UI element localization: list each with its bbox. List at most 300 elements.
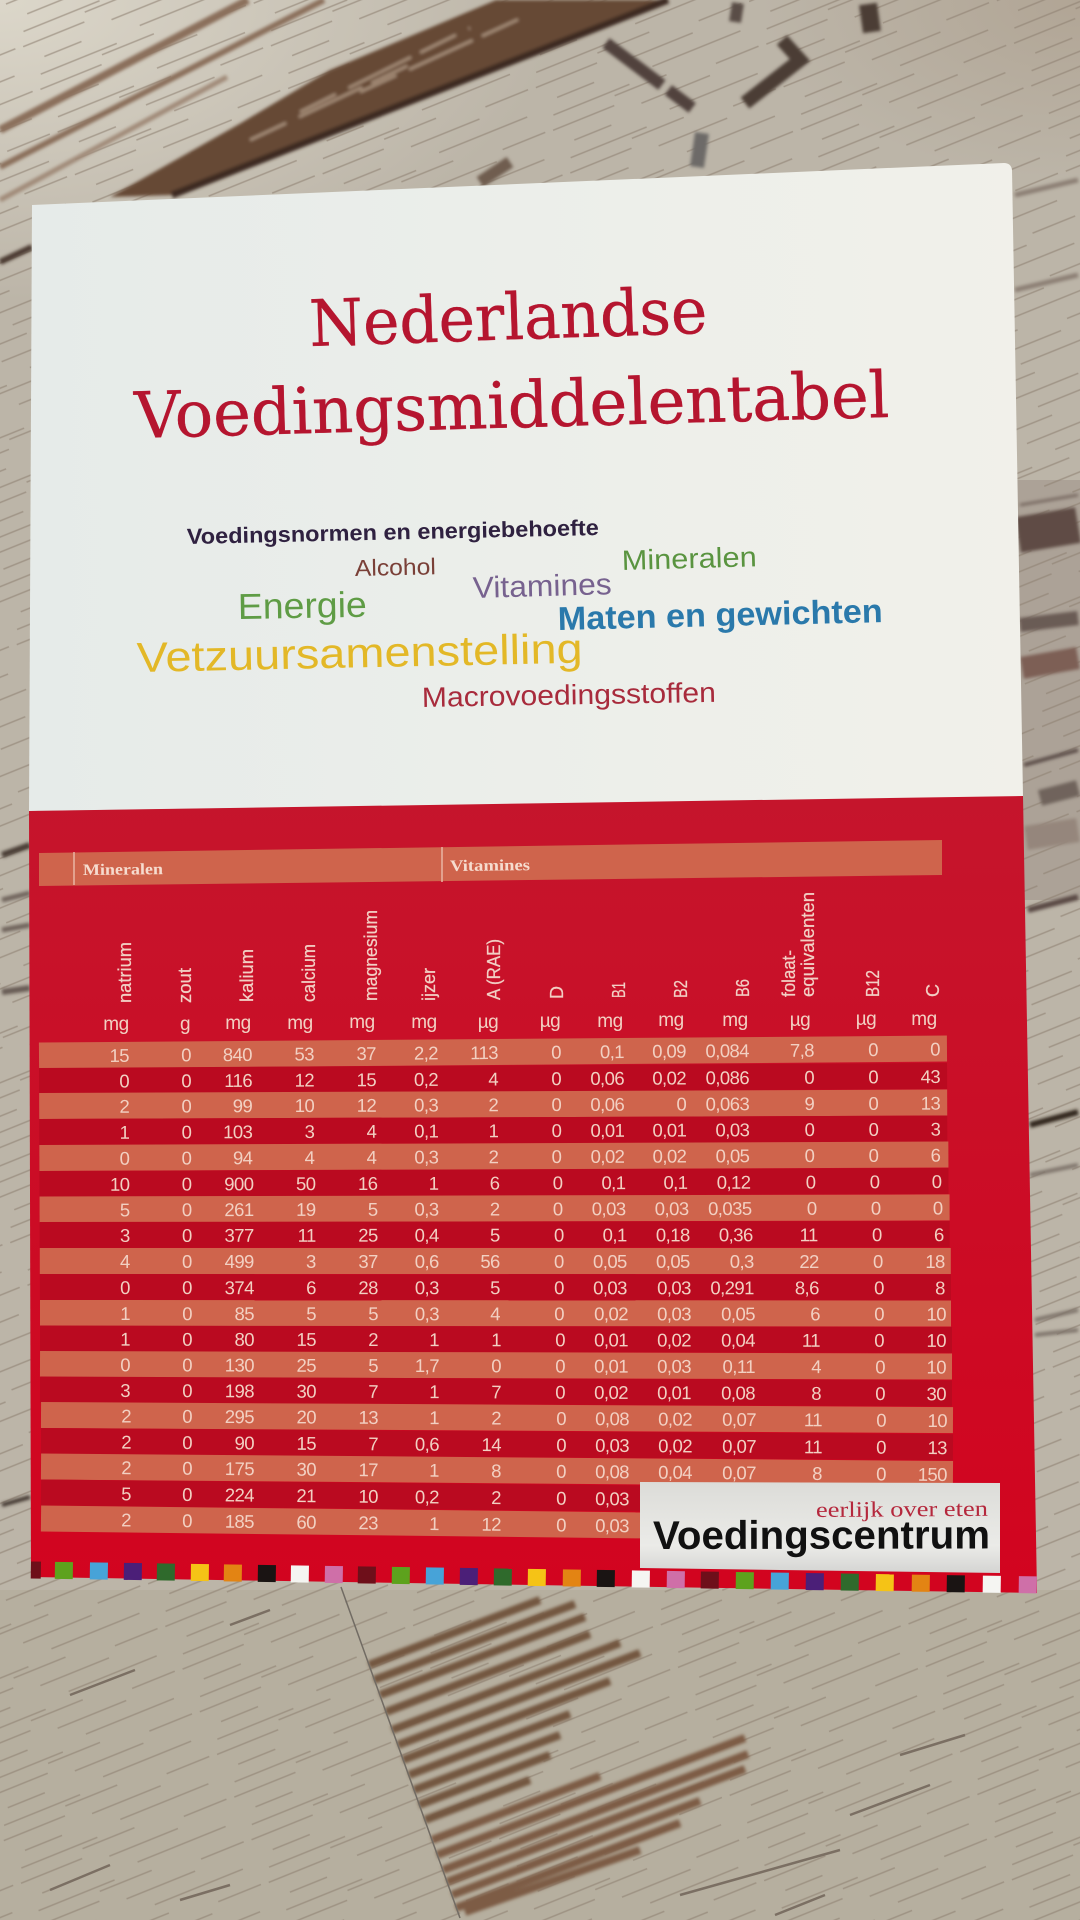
table row 4: 4 bbox=[367, 1121, 377, 1142]
word cloud of topics bbox=[136, 515, 883, 713]
table row 17: 17 bbox=[358, 1459, 378, 1480]
table row 16: 13 bbox=[927, 1437, 947, 1458]
table row 3: 0,063 bbox=[706, 1093, 749, 1114]
table row 15: 0,08 bbox=[595, 1408, 629, 1429]
table row 16: 0 bbox=[876, 1437, 886, 1458]
table row 4: 0 bbox=[805, 1119, 815, 1140]
unit labels row bbox=[103, 1009, 937, 1035]
rotated column headers: ijzer bbox=[419, 968, 439, 1001]
unit labels row: µg bbox=[478, 1012, 498, 1033]
table row 1: 15 bbox=[109, 1045, 129, 1066]
rotated column headers: equivalenten bbox=[798, 892, 818, 997]
table row 11 bbox=[40, 1300, 951, 1326]
table row 7: 5 bbox=[368, 1199, 378, 1220]
table row 1: 0,09 bbox=[652, 1041, 686, 1062]
table row 17: 0 bbox=[876, 1463, 886, 1484]
table row 9: 0,05 bbox=[593, 1251, 627, 1272]
table row 8: 5 bbox=[490, 1225, 500, 1246]
table row 19: 0 bbox=[556, 1514, 566, 1536]
table row 17: 150 bbox=[918, 1464, 947, 1485]
table row 8: 0,4 bbox=[415, 1225, 439, 1246]
table row 3: 0 bbox=[181, 1095, 191, 1116]
table row 9: 0 bbox=[554, 1251, 564, 1272]
table row 15: 0,07 bbox=[722, 1409, 756, 1430]
table row 17: 0,08 bbox=[595, 1461, 629, 1482]
table row 17: 2 bbox=[121, 1457, 131, 1478]
table row 12: 0,04 bbox=[721, 1330, 755, 1351]
table row 19: 2 bbox=[121, 1509, 131, 1531]
table row 12: 2 bbox=[368, 1329, 378, 1350]
table row 10: 0 bbox=[120, 1277, 130, 1298]
table row 15: 20 bbox=[296, 1406, 316, 1428]
table row 11: 6 bbox=[810, 1303, 820, 1324]
table row 17: 8 bbox=[491, 1460, 501, 1481]
table row 9: 4 bbox=[120, 1251, 130, 1272]
table row 5: 0,3 bbox=[414, 1146, 439, 1168]
table row 16: 15 bbox=[296, 1433, 316, 1454]
table row 1: 0 bbox=[868, 1039, 878, 1060]
title: Nederlandse bbox=[308, 275, 708, 362]
table row 8: 377 bbox=[224, 1225, 254, 1246]
table row 8: 0 bbox=[182, 1225, 192, 1246]
table row 2: 43 bbox=[921, 1066, 940, 1087]
table row 6: 0 bbox=[182, 1173, 192, 1195]
table row 18: 0 bbox=[556, 1488, 566, 1509]
table row 13 bbox=[40, 1351, 952, 1380]
word cloud of topics: Mineralen bbox=[621, 541, 757, 576]
table row 8: 25 bbox=[358, 1225, 378, 1246]
table row 19: 1 bbox=[429, 1513, 439, 1534]
table row 7: 0,03 bbox=[592, 1198, 626, 1219]
table row 14 bbox=[40, 1377, 952, 1406]
table row 18: 224 bbox=[225, 1484, 254, 1506]
table row 5: 4 bbox=[367, 1147, 377, 1168]
table row 13: 0 bbox=[182, 1354, 192, 1375]
table row 1: 53 bbox=[294, 1043, 314, 1065]
table row 10: 0 bbox=[874, 1277, 884, 1298]
table row 9: 0,6 bbox=[415, 1251, 439, 1272]
rotated column headers: folaat- bbox=[779, 950, 799, 997]
table row 10: 6 bbox=[306, 1277, 316, 1298]
rotated column headers: B2 bbox=[671, 980, 691, 998]
table row 7: 0 bbox=[871, 1198, 881, 1219]
table row 19: 0 bbox=[182, 1510, 192, 1531]
table row 6: 0 bbox=[806, 1171, 816, 1192]
table row 10: 0,3 bbox=[415, 1277, 439, 1298]
table row 5: 2 bbox=[489, 1146, 499, 1167]
table row 10: 28 bbox=[358, 1277, 378, 1298]
table row 5: 6 bbox=[931, 1145, 941, 1166]
table row 14: 1 bbox=[429, 1381, 439, 1402]
table row 7: 5 bbox=[120, 1199, 130, 1220]
unit labels row: µg bbox=[790, 1010, 810, 1031]
table row 8: 3 bbox=[120, 1225, 130, 1246]
table row 4: 1 bbox=[489, 1120, 499, 1141]
table row 12: 11 bbox=[802, 1330, 820, 1351]
table header strip bbox=[39, 840, 942, 886]
table row 6: 1 bbox=[429, 1173, 439, 1194]
table row 14: 8 bbox=[811, 1383, 821, 1404]
table row 13: 10 bbox=[926, 1356, 946, 1378]
table row 3: 0,3 bbox=[414, 1094, 438, 1116]
table row 13: 4 bbox=[811, 1356, 821, 1377]
table row 16: 0,02 bbox=[658, 1435, 692, 1456]
table row 19: 185 bbox=[225, 1511, 254, 1532]
table row 2: 0 bbox=[804, 1067, 814, 1088]
nutrient data table bbox=[39, 1036, 953, 1538]
table row 2: 0 bbox=[551, 1068, 561, 1089]
table row 11: 0,03 bbox=[657, 1303, 691, 1324]
table row 7: 0,035 bbox=[708, 1198, 752, 1219]
table row 3: 0 bbox=[676, 1094, 686, 1115]
table row 5: 0 bbox=[805, 1145, 815, 1166]
table row 3: 0 bbox=[551, 1094, 561, 1115]
table row 5: 0,02 bbox=[653, 1146, 687, 1167]
table row 14: 198 bbox=[225, 1380, 254, 1401]
table row 2: 116 bbox=[224, 1070, 252, 1091]
table row 14: 30 bbox=[296, 1381, 316, 1402]
table row 13: 0 bbox=[555, 1355, 565, 1376]
table row 12: 1 bbox=[120, 1329, 130, 1350]
table row 4: 1 bbox=[120, 1122, 130, 1143]
table row 18: 21 bbox=[296, 1485, 316, 1506]
word cloud of topics: Voedingsnormen en energiebehoefte bbox=[187, 515, 599, 549]
table row 19: 23 bbox=[358, 1512, 378, 1533]
table row 6 bbox=[39, 1168, 949, 1197]
table row 15: 11 bbox=[804, 1409, 822, 1430]
table row 2: 0 bbox=[868, 1066, 878, 1087]
unit labels row: mg bbox=[911, 1009, 937, 1030]
table row 17: 30 bbox=[296, 1459, 316, 1480]
table row 4: 0,01 bbox=[652, 1120, 687, 1141]
table row 13: 1,7 bbox=[415, 1355, 439, 1376]
table header strip: Vitamines bbox=[450, 857, 530, 875]
table row 14: 0,08 bbox=[721, 1382, 755, 1403]
table row 1: 0,1 bbox=[600, 1041, 624, 1062]
table row 12: 0,02 bbox=[657, 1329, 691, 1351]
table row 17: 1 bbox=[429, 1460, 439, 1481]
table row 11: 0 bbox=[554, 1303, 564, 1324]
table row 9: 0,3 bbox=[730, 1251, 754, 1272]
table row 2: 12 bbox=[295, 1069, 314, 1091]
title bbox=[132, 275, 890, 454]
table row 17: 0 bbox=[182, 1458, 192, 1479]
rotated column headers: D bbox=[547, 986, 567, 999]
table row 19: 12 bbox=[481, 1514, 501, 1535]
table row 8 bbox=[40, 1221, 950, 1248]
table row 12 bbox=[40, 1326, 952, 1353]
table row 18: 0,03 bbox=[595, 1488, 629, 1509]
table row 7: 0 bbox=[182, 1199, 192, 1220]
table row 16: 90 bbox=[234, 1432, 254, 1453]
table row 16: 0,03 bbox=[595, 1435, 629, 1456]
table row 14: 0 bbox=[555, 1382, 565, 1403]
table row 7 bbox=[40, 1194, 950, 1222]
table row 13: 0,03 bbox=[657, 1356, 691, 1377]
table row 4: 0,03 bbox=[715, 1119, 750, 1140]
table row 5: 0,05 bbox=[716, 1145, 750, 1166]
table row 3: 10 bbox=[295, 1095, 314, 1116]
table row 10: 0,291 bbox=[710, 1277, 754, 1298]
table row 2: 4 bbox=[488, 1068, 498, 1089]
table row 12: 0 bbox=[555, 1329, 565, 1350]
rotated column headers: zout bbox=[175, 968, 195, 1003]
coloured squares strip bbox=[31, 1562, 1037, 1593]
table row 17: 0,04 bbox=[658, 1462, 692, 1483]
table row 5: 0 bbox=[182, 1147, 192, 1168]
table row 4: 0,01 bbox=[590, 1120, 625, 1141]
table row 6: 0,1 bbox=[601, 1172, 626, 1193]
table row 5: 0 bbox=[552, 1146, 562, 1167]
table row 14: 7 bbox=[491, 1381, 501, 1402]
table row 10: 0 bbox=[182, 1277, 192, 1298]
table row 18: 10 bbox=[358, 1486, 378, 1507]
table row 3: 0,06 bbox=[590, 1094, 624, 1115]
word cloud of topics: Energie bbox=[237, 584, 367, 627]
table row 13: 0 bbox=[875, 1356, 885, 1377]
table row 15: 2 bbox=[491, 1408, 501, 1429]
table row 2: 0,086 bbox=[705, 1067, 749, 1088]
unit labels row: mg bbox=[103, 1014, 129, 1035]
table row 9: 37 bbox=[358, 1251, 378, 1272]
table row 12: 10 bbox=[926, 1330, 946, 1351]
table row 8: 0,36 bbox=[719, 1224, 753, 1245]
table row 4: 0 bbox=[869, 1119, 879, 1140]
table row 10: 374 bbox=[225, 1277, 254, 1298]
table row 10: 0 bbox=[554, 1277, 564, 1298]
table row 6: 16 bbox=[358, 1173, 378, 1194]
table row 6: 50 bbox=[296, 1173, 316, 1194]
table row 6: 10 bbox=[110, 1174, 130, 1195]
table row 1: 2,2 bbox=[414, 1042, 438, 1064]
table row 7: 0 bbox=[553, 1198, 563, 1219]
table row 2 bbox=[39, 1063, 947, 1094]
rotated column headers: magnesium bbox=[361, 910, 381, 1001]
table row 18 bbox=[41, 1480, 641, 1511]
table row 17: 0,07 bbox=[722, 1462, 756, 1483]
table row 15: 1 bbox=[429, 1407, 439, 1428]
cover: red lower panel bbox=[29, 796, 1037, 1593]
table row 14: 0,01 bbox=[657, 1382, 691, 1403]
rotated column headers: B12 bbox=[863, 970, 883, 997]
table row 5: 4 bbox=[305, 1147, 315, 1168]
rotated column headers: calcium bbox=[299, 944, 319, 1002]
table row 9: 0 bbox=[873, 1251, 883, 1272]
table row 13: 25 bbox=[296, 1355, 316, 1376]
table row 14: 0,02 bbox=[594, 1382, 628, 1403]
cover: white upper panel bbox=[29, 163, 1023, 811]
table row 5: 0 bbox=[869, 1145, 879, 1166]
table row 9: 0 bbox=[182, 1251, 192, 1272]
table row 5: 0,02 bbox=[591, 1146, 625, 1167]
table row 16 bbox=[41, 1428, 953, 1460]
table row 12: 0 bbox=[874, 1330, 884, 1351]
rotated column headers: A (RAE) bbox=[484, 939, 504, 1000]
table row 7: 19 bbox=[296, 1199, 316, 1220]
table row 19: 60 bbox=[296, 1511, 316, 1533]
table row 9: 499 bbox=[225, 1251, 254, 1272]
table row 1: 840 bbox=[223, 1044, 252, 1065]
rotated column headers: B1 bbox=[609, 982, 629, 998]
table row 6: 6 bbox=[490, 1172, 500, 1194]
table row 11: 85 bbox=[235, 1303, 254, 1324]
table row 6: 0,1 bbox=[663, 1172, 688, 1193]
rotated column headers: B6 bbox=[733, 979, 753, 997]
book cover bbox=[29, 163, 1037, 1593]
table row 8: 0,1 bbox=[603, 1224, 627, 1245]
word cloud of topics: Vetzuursamenstelling bbox=[136, 625, 583, 681]
unit labels row: mg bbox=[287, 1013, 313, 1034]
table row 16: 2 bbox=[121, 1432, 131, 1453]
table row 9: 56 bbox=[480, 1251, 500, 1272]
table row 1: 0 bbox=[930, 1039, 940, 1060]
table row 15: 0 bbox=[876, 1410, 886, 1431]
table row 15: 0 bbox=[556, 1408, 566, 1429]
table row 12: 80 bbox=[234, 1329, 254, 1350]
Voedingscentrum logo box bbox=[640, 1482, 1000, 1573]
title: Voedingsmiddelentabel bbox=[132, 359, 890, 454]
table row 10: 5 bbox=[490, 1277, 500, 1298]
table row 11: 0 bbox=[874, 1303, 884, 1324]
table row 15: 13 bbox=[358, 1407, 378, 1428]
table row 6: 0 bbox=[553, 1172, 563, 1193]
table row 15 bbox=[41, 1402, 953, 1433]
table row 11: 0,3 bbox=[415, 1303, 439, 1324]
table row 11: 5 bbox=[368, 1303, 378, 1324]
table row 2: 15 bbox=[357, 1069, 376, 1090]
table row 1: 7,8 bbox=[790, 1040, 814, 1061]
table row 8: 0 bbox=[554, 1224, 564, 1245]
table row 6: 0 bbox=[932, 1171, 942, 1192]
table row 10 bbox=[40, 1274, 951, 1300]
table row 13: 5 bbox=[368, 1355, 378, 1376]
table row 7: 0,3 bbox=[414, 1199, 439, 1220]
table row 17: 175 bbox=[225, 1458, 254, 1479]
table row 17: 8 bbox=[812, 1463, 822, 1484]
table row 12: 0 bbox=[182, 1329, 192, 1350]
table row 18: 5 bbox=[121, 1483, 131, 1504]
table row 12: 15 bbox=[296, 1329, 316, 1350]
table row 9: 18 bbox=[925, 1251, 945, 1272]
table row 7: 261 bbox=[224, 1199, 254, 1220]
table row 7: 0,03 bbox=[655, 1198, 689, 1219]
unit labels row: mg bbox=[658, 1010, 684, 1031]
table row 9 bbox=[40, 1248, 951, 1274]
unit labels row: mg bbox=[597, 1011, 623, 1032]
table row 7: 0 bbox=[807, 1198, 817, 1219]
rotated column headers: kalium bbox=[237, 949, 257, 1002]
unit labels row: µg bbox=[540, 1011, 560, 1032]
table header strip: Mineralen bbox=[83, 861, 163, 879]
table row 15: 0,02 bbox=[658, 1408, 692, 1430]
table row 15: 295 bbox=[225, 1406, 254, 1427]
table row 13: 0,11 bbox=[723, 1356, 755, 1377]
table row 18: 0,2 bbox=[415, 1486, 439, 1507]
table row 8: 0,18 bbox=[656, 1224, 690, 1245]
table row 11: 0,05 bbox=[721, 1303, 755, 1324]
table row 9: 0,05 bbox=[656, 1251, 690, 1272]
word cloud of topics: Vitamines bbox=[472, 568, 612, 605]
table row 8: 11 bbox=[800, 1224, 818, 1245]
table row 16: 0,6 bbox=[415, 1434, 439, 1455]
table row 14: 30 bbox=[926, 1383, 946, 1404]
table row 19: 0,03 bbox=[595, 1515, 629, 1536]
table row 3: 9 bbox=[804, 1093, 814, 1114]
table row 3: 2 bbox=[488, 1094, 498, 1115]
table row 3: 12 bbox=[357, 1095, 376, 1116]
table row 6: 0,12 bbox=[717, 1172, 751, 1193]
table row 10: 8,6 bbox=[795, 1277, 819, 1298]
table row 11: 5 bbox=[306, 1303, 316, 1324]
table row 14: 7 bbox=[368, 1381, 378, 1402]
unit labels row: mg bbox=[225, 1013, 251, 1034]
table row 18: 2 bbox=[491, 1487, 501, 1508]
table row 16: 7 bbox=[368, 1433, 378, 1454]
table row 4: 0 bbox=[182, 1121, 192, 1142]
table row 1: 37 bbox=[356, 1043, 376, 1064]
table row 19 bbox=[41, 1506, 641, 1538]
table row 12: 1 bbox=[429, 1329, 439, 1350]
table row 7: 0 bbox=[933, 1197, 943, 1218]
table row 8: 6 bbox=[934, 1224, 944, 1245]
table row 16: 0 bbox=[556, 1435, 566, 1456]
table row 15: 10 bbox=[927, 1410, 947, 1431]
table row 10: 0,03 bbox=[657, 1277, 691, 1298]
table row 11: 1 bbox=[120, 1303, 130, 1324]
table row 3: 0 bbox=[868, 1093, 878, 1114]
Voedingscentrum logo box: Voedingscentrum bbox=[653, 1513, 990, 1558]
table row 5: 0 bbox=[120, 1148, 130, 1169]
table row 13: 0,01 bbox=[594, 1356, 628, 1377]
table row 14: 0 bbox=[182, 1380, 192, 1401]
table row 17: 0 bbox=[556, 1461, 566, 1482]
table row 12: 1 bbox=[491, 1329, 501, 1350]
table row 8: 11 bbox=[298, 1225, 316, 1246]
table row 6: 0 bbox=[870, 1171, 880, 1192]
table row 6: 900 bbox=[224, 1173, 254, 1194]
table row 4: 0 bbox=[552, 1120, 562, 1141]
table row 10: 0,03 bbox=[593, 1277, 627, 1298]
table row 1: 0 bbox=[181, 1044, 191, 1065]
table row 5: 94 bbox=[233, 1147, 253, 1168]
table row 3 bbox=[39, 1090, 947, 1119]
word cloud of topics: Alcohol bbox=[355, 553, 436, 581]
table row 1: 113 bbox=[470, 1042, 498, 1063]
table row 14: 0 bbox=[875, 1383, 885, 1404]
table row 9: 22 bbox=[799, 1251, 819, 1272]
table row 4 bbox=[39, 1116, 947, 1145]
table row 15: 2 bbox=[121, 1405, 131, 1427]
table row 3: 99 bbox=[233, 1095, 252, 1116]
table row 4: 0,1 bbox=[414, 1120, 439, 1142]
table row 11: 10 bbox=[927, 1303, 946, 1324]
table row 2: 0,06 bbox=[590, 1068, 624, 1089]
table row 18: 0 bbox=[182, 1484, 192, 1505]
table row 1: 0 bbox=[551, 1041, 561, 1063]
table row 16: 11 bbox=[804, 1436, 822, 1457]
table row 1 bbox=[39, 1036, 947, 1068]
table row 15: 0 bbox=[182, 1406, 192, 1427]
table row 8: 0 bbox=[872, 1224, 882, 1245]
unit labels row: µg bbox=[856, 1009, 876, 1030]
Voedingscentrum logo box: eerlijk over eten bbox=[816, 1496, 988, 1522]
table row 2: 0 bbox=[119, 1070, 129, 1092]
table row 2: 0,2 bbox=[414, 1069, 438, 1090]
rotated column headers: C bbox=[923, 984, 943, 997]
unit labels row: g bbox=[180, 1014, 190, 1035]
table row 13: 0 bbox=[120, 1354, 130, 1375]
rotated column headers: natrium bbox=[115, 942, 135, 1003]
